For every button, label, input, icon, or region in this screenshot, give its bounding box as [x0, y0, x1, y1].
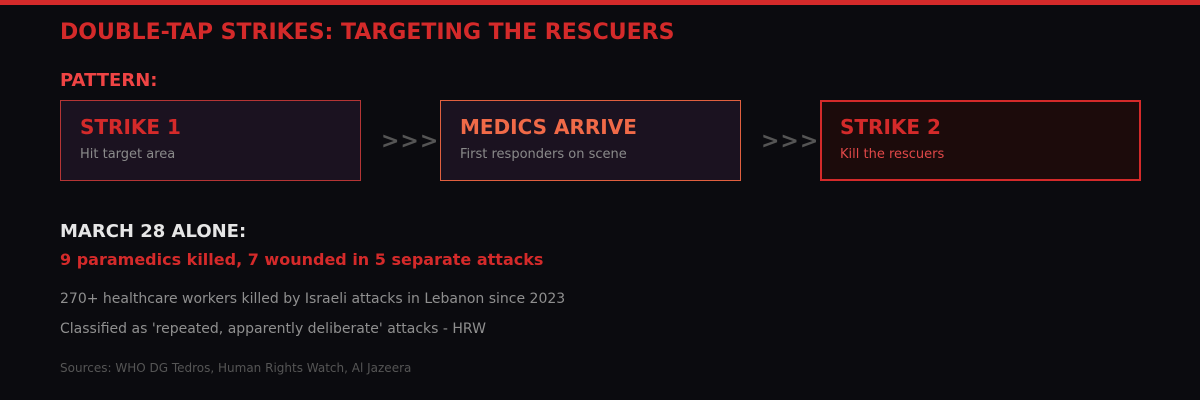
panel: strike 2: STRIKE 2: [840, 115, 941, 139]
arrow 1: >>>: [381, 129, 439, 154]
panel: medics arrive: MEDICS ARRIVE: [460, 115, 637, 139]
panel: strike 1: [60, 100, 361, 181]
sources: Sources: WHO DG Tedros, Human Rights Watch, Al Jazeera: [60, 361, 411, 375]
healthcare stat: 270+ healthcare workers killed by Israeli attacks in Lebanon since 2023: [60, 291, 565, 307]
pattern heading: PATTERN:: [60, 70, 157, 91]
title: DOUBLE-TAP STRIKES: TARGETING THE RESCUERS: [60, 20, 674, 45]
panel: medics arrive: [440, 100, 741, 181]
panel: strike 1: STRIKE 1: [80, 115, 181, 139]
panel: strike 2: Kill the rescuers: [840, 147, 944, 162]
panel: strike 1: Hit target area: [80, 147, 175, 162]
casualty stat: 9 paramedics killed, 7 wounded in 5 separate attacks: [60, 250, 543, 269]
arrow 2: >>>: [761, 129, 819, 154]
top red bar: [0, 0, 1200, 5]
panel: strike 2: [820, 100, 1141, 181]
march 28 heading: MARCH 28 ALONE:: [60, 221, 246, 242]
HRW classification: Classified as 'repeated, apparently deliberate' attacks - HRW: [60, 321, 486, 337]
panel: medics arrive: First responders on scene: [460, 147, 627, 162]
